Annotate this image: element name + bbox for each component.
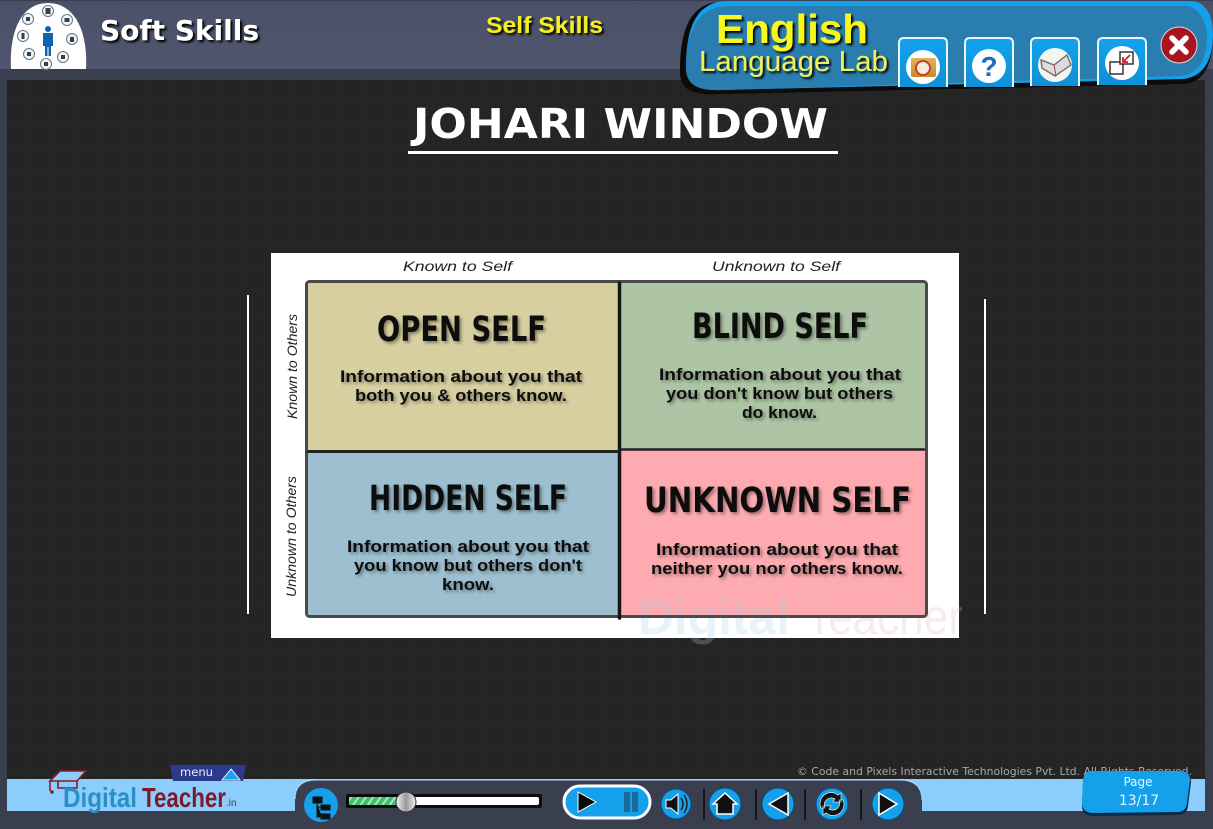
johari window diagram [271, 253, 963, 645]
menu arrow [222, 769, 240, 780]
button: book [1031, 38, 1079, 86]
digital teacher logo [50, 771, 237, 813]
page label: Page [1123, 775, 1153, 789]
quadrant: unknown self [620, 449, 963, 645]
logo wordmark: Teacher [142, 782, 226, 813]
banner: English: English [716, 6, 868, 52]
hidden self description: Information about you that [347, 537, 589, 556]
axis label: known to others: Known to Others [284, 314, 300, 419]
axis label: unknown to others: Unknown to Others [283, 476, 299, 597]
logo wordmark: Digital [63, 782, 137, 813]
quadrant: hidden self [307, 451, 619, 616]
media control panel [295, 780, 922, 829]
button: help [965, 38, 1013, 87]
button: help: ? [980, 51, 998, 82]
unknown self description: Information about you that [656, 540, 898, 559]
control dividers [704, 789, 861, 820]
button: close [1161, 27, 1197, 63]
watermark: Digital [638, 589, 790, 645]
blind self description: Information about you that [659, 365, 901, 384]
logo wordmark [63, 782, 237, 813]
logo wordmark: .in [226, 798, 237, 809]
header bar [0, 1, 1213, 69]
page indicator badge [1082, 771, 1191, 816]
footer light blue band [7, 779, 1205, 811]
open self description: both you & others know. [355, 386, 567, 405]
unknown self description [651, 540, 903, 578]
header: soft skills logo [11, 3, 86, 70]
blind self description [659, 365, 901, 422]
hidden self description [347, 537, 589, 594]
blind self description: you don't know but others [666, 384, 893, 403]
play pause control [564, 786, 650, 818]
hidden self heading: HIDDEN SELF [369, 479, 567, 519]
icon: refresh [816, 788, 848, 820]
open self description: Information about you that [340, 367, 582, 386]
header: English Language Lab banner [680, 1, 1213, 94]
hidden self description: you know but others don't [354, 556, 582, 575]
graduation cap [50, 771, 86, 794]
open self heading: OPEN SELF [377, 310, 546, 350]
icon: next [872, 788, 904, 820]
unknown self description: neither you nor others know. [651, 559, 903, 578]
unknown self heading: UNKNOWN SELF [644, 481, 911, 521]
icon: speaker [661, 789, 691, 819]
right bracket line [984, 299, 986, 614]
header: section title: Self Skills [486, 12, 603, 38]
menu label: menu [180, 765, 213, 779]
blind self description: do know. [742, 403, 817, 422]
banner: Language Lab: Language Lab [699, 46, 888, 78]
button: resize window [1098, 38, 1146, 85]
copyright notice: © Code and Pixels Interactive Technologies Pvt. Ltd. All Rights Reserved. [797, 766, 1192, 778]
title: JOHARI WINDOW [410, 100, 828, 148]
icon: previous [762, 788, 794, 820]
header: course title: Soft Skills [100, 14, 259, 47]
watermark: Teacher [806, 589, 963, 645]
axis label: known to self: Known to Self [403, 258, 515, 274]
open self description [340, 367, 582, 405]
icon: outline tree [304, 788, 338, 822]
button: bookmark folder [899, 38, 947, 87]
left bracket line [247, 295, 249, 614]
page number: 13/17 [1119, 793, 1159, 809]
title underline [408, 151, 838, 154]
axis label: unknown to self: Unknown to Self [712, 258, 843, 274]
quadrant: blind self [620, 282, 926, 449]
footer bottom strip [0, 811, 1213, 829]
blind self heading: BLIND SELF [692, 307, 868, 347]
hidden self description: know. [442, 575, 494, 594]
progress slider [346, 792, 542, 812]
window frame and dividers [306, 282, 926, 618]
icon: home [709, 788, 741, 820]
watermark [638, 589, 963, 645]
quadrant: open self [307, 282, 619, 451]
menu tab [170, 765, 246, 781]
